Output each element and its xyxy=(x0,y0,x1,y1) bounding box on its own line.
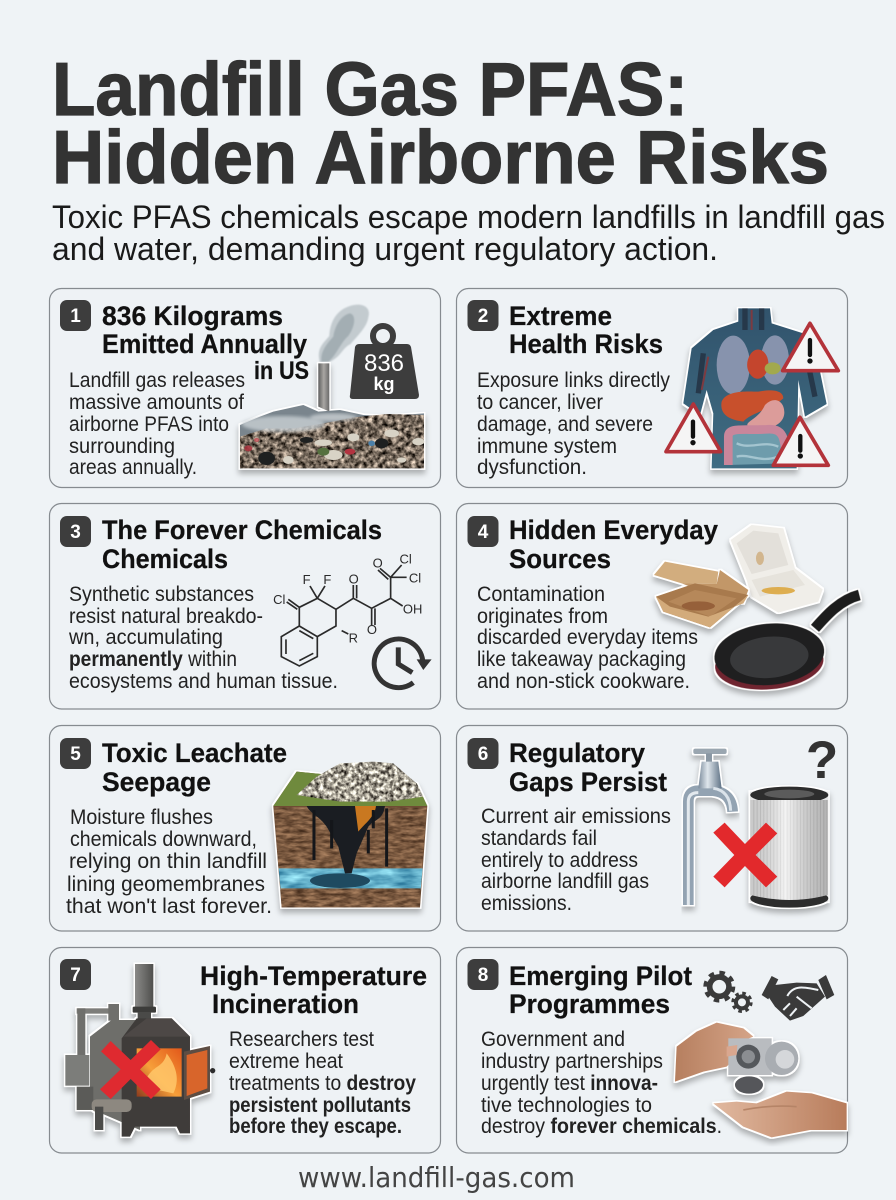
footer url: www.landfill-gas.com xyxy=(298,1161,575,1194)
heading 5: Seepage xyxy=(102,767,211,797)
body text 8: tive technologies to xyxy=(481,1094,652,1117)
icon: molecule diagram: Cl xyxy=(273,592,286,607)
panel 1: 836 kilograms emitted xyxy=(50,288,440,488)
heading 3: Chemicals xyxy=(102,544,228,574)
body text 8: urgently test innova- xyxy=(481,1072,658,1095)
body text 3 xyxy=(68,583,338,693)
icon: 836 kg weight: 836 xyxy=(364,350,404,377)
badge 4: 4 xyxy=(478,522,489,543)
heading 3 xyxy=(102,515,382,574)
title xyxy=(52,47,829,199)
body text 8: Government and xyxy=(481,1028,625,1051)
subtitle: Toxic PFAS chemicals escape modern landfills in landfill gas xyxy=(52,199,885,235)
heading 8 xyxy=(509,961,692,1019)
body text 4: discarded everyday items xyxy=(477,626,698,649)
icon: molecule diagram: OH xyxy=(403,601,422,616)
body text 2: to cancer, liver xyxy=(477,391,603,414)
body text 4: Contamination xyxy=(477,583,605,606)
badge 1: 1 xyxy=(70,306,81,327)
body text 5: Moisture flushes xyxy=(70,806,213,829)
icon: question mark: ? xyxy=(806,731,838,790)
heading 6 xyxy=(509,738,667,797)
panel 5: toxic leachate seepage xyxy=(50,726,440,931)
icon: handshake xyxy=(762,975,834,1021)
icon: kraft takeaway box xyxy=(654,562,748,627)
badge 7: 7 xyxy=(70,965,81,986)
body text 1: airborne PFAS into xyxy=(69,413,229,436)
panel 7: high-temperature incineration xyxy=(50,948,440,1153)
body text 3: ecosystems and human tissue. xyxy=(69,670,338,693)
heading 7: Incineration xyxy=(212,989,359,1019)
badge 8: 8 xyxy=(478,965,488,986)
body text 1: surrounding xyxy=(69,435,175,458)
body text 5 xyxy=(66,806,272,918)
heading 1 xyxy=(102,301,309,385)
heading 1: in US xyxy=(254,357,309,385)
heading 6: Regulatory xyxy=(509,738,645,768)
icon: red cross xyxy=(713,823,777,887)
badge 3 xyxy=(60,516,91,547)
body text 7: extreme heat xyxy=(229,1050,343,1073)
body text 1 xyxy=(69,369,245,479)
badge 6 xyxy=(468,738,498,769)
heading 5: Toxic Leachate xyxy=(102,738,287,768)
body text 3: resist natural breakdo- xyxy=(69,605,263,628)
body text 4: like takeaway packaging xyxy=(477,648,686,671)
body text 8 xyxy=(481,1028,722,1138)
subtitle xyxy=(52,199,885,267)
badge 7 xyxy=(60,959,91,990)
icon: air filter cartridge xyxy=(750,787,828,908)
icon: clock with circular arrow xyxy=(374,639,432,688)
icon: molecule diagram: O xyxy=(373,555,383,570)
icon: smokestack and landfill xyxy=(240,305,424,468)
body text 5: that won't last forever. xyxy=(66,895,272,918)
body text 6: entirely to address xyxy=(481,849,638,872)
body text 6 xyxy=(481,805,671,915)
body text 7: before they escape. xyxy=(229,1115,402,1138)
icon: molecule diagram: O xyxy=(367,622,377,637)
body text 1: Landfill gas releases xyxy=(69,369,245,392)
body text 8: destroy forever chemicals. xyxy=(481,1115,722,1138)
icon: molecule diagram xyxy=(273,551,422,666)
body text 4 xyxy=(477,583,698,693)
body text 2 xyxy=(477,369,670,479)
title: Landfill Gas PFAS: xyxy=(52,47,688,131)
body text 6: airborne landfill gas xyxy=(481,870,649,893)
icon: molecule diagram: Cl xyxy=(399,551,412,566)
body text 6: emissions. xyxy=(481,892,572,915)
icon: white takeaway box xyxy=(731,525,823,613)
panel 6: regulatory gaps persist xyxy=(456,726,848,931)
heading 5 xyxy=(102,738,287,797)
heading 1: Emitted Annually xyxy=(102,329,307,359)
body text 6: Current air emissions xyxy=(481,805,671,828)
body text 3: Synthetic substances xyxy=(69,583,254,606)
heading 4: Sources xyxy=(509,544,611,574)
panel 2: extreme health risks xyxy=(456,288,848,488)
body text 4: and non-stick cookware. xyxy=(477,670,690,693)
heading 7 xyxy=(200,961,427,1019)
body text 6: standards fail xyxy=(481,827,597,850)
body text 1: massive amounts of xyxy=(69,391,244,414)
badge 8 xyxy=(468,959,498,990)
body text 5: relying on thin landfill xyxy=(69,850,267,873)
badge 3: 3 xyxy=(70,522,81,543)
panel 3: the forever chemicals xyxy=(50,504,440,709)
body text 7: Researchers test xyxy=(229,1028,374,1051)
body text 2: damage, and severe xyxy=(477,413,653,436)
icon: human torso with organs and warning triangles xyxy=(666,308,838,468)
badge 4 xyxy=(468,516,498,547)
icon: molecule diagram: Cl xyxy=(409,571,421,586)
icon: 836 kg weight: kg xyxy=(373,374,395,394)
heading 3: The Forever Chemicals xyxy=(102,515,382,545)
body text 3: wn, accumulating xyxy=(68,626,223,649)
title: Hidden Airborne Risks xyxy=(52,115,829,199)
body text 3: permanently within xyxy=(69,648,237,671)
body text 5: chemicals downward, xyxy=(70,828,257,851)
body text 2: Exposure links directly xyxy=(477,369,670,392)
heading 2: Extreme xyxy=(509,301,612,331)
heading 4: Hidden Everyday xyxy=(509,515,718,545)
panel 4: hidden everyday sources xyxy=(456,504,859,709)
panel 8: emerging pilot programmes xyxy=(456,948,848,1153)
icon: non-stick frying pan xyxy=(712,595,859,694)
heading 6: Gaps Persist xyxy=(509,767,667,797)
badge 5 xyxy=(60,738,91,769)
body text 2: immune system xyxy=(477,435,617,458)
badge 1 xyxy=(60,300,91,331)
body text 7: persistent pollutants xyxy=(229,1094,411,1117)
icon: landfill soil cross-section xyxy=(273,762,427,907)
icon: water tap xyxy=(688,749,733,905)
icon: hand holding technology over open hand xyxy=(675,1023,847,1137)
subtitle: and water, demanding urgent regulatory action. xyxy=(52,231,718,267)
body text 4: originates from xyxy=(477,605,608,628)
icon: gears xyxy=(706,973,751,1011)
heading 4 xyxy=(509,515,718,574)
badge 2: 2 xyxy=(478,306,488,327)
body text 2: dysfunction. xyxy=(477,456,587,479)
icon: molecule diagram: F xyxy=(303,572,311,587)
heading 2 xyxy=(509,301,663,359)
icon: molecule diagram: R xyxy=(349,630,358,645)
heading 2: Health Risks xyxy=(509,329,663,359)
badge 5: 5 xyxy=(70,744,81,765)
heading 8: Emerging Pilot xyxy=(509,961,692,991)
body text 7 xyxy=(229,1028,416,1138)
icon: molecule diagram: F xyxy=(323,572,331,587)
heading 8: Programmes xyxy=(509,989,670,1019)
icon: incinerator furnace with red cross xyxy=(65,964,215,1137)
heading 7: High-Temperature xyxy=(200,961,427,991)
body text 8: industry partnerships xyxy=(481,1050,663,1073)
icon: 836 kg weight xyxy=(350,326,419,399)
body text 1: areas annually. xyxy=(69,456,197,479)
badge 6: 6 xyxy=(478,744,488,765)
body text 5: lining geomembranes xyxy=(67,873,265,896)
badge 2 xyxy=(468,300,498,331)
body text 7: treatments to destroy xyxy=(229,1072,416,1095)
heading 1: 836 Kilograms xyxy=(102,301,283,331)
icon: molecule diagram: O xyxy=(349,571,359,586)
